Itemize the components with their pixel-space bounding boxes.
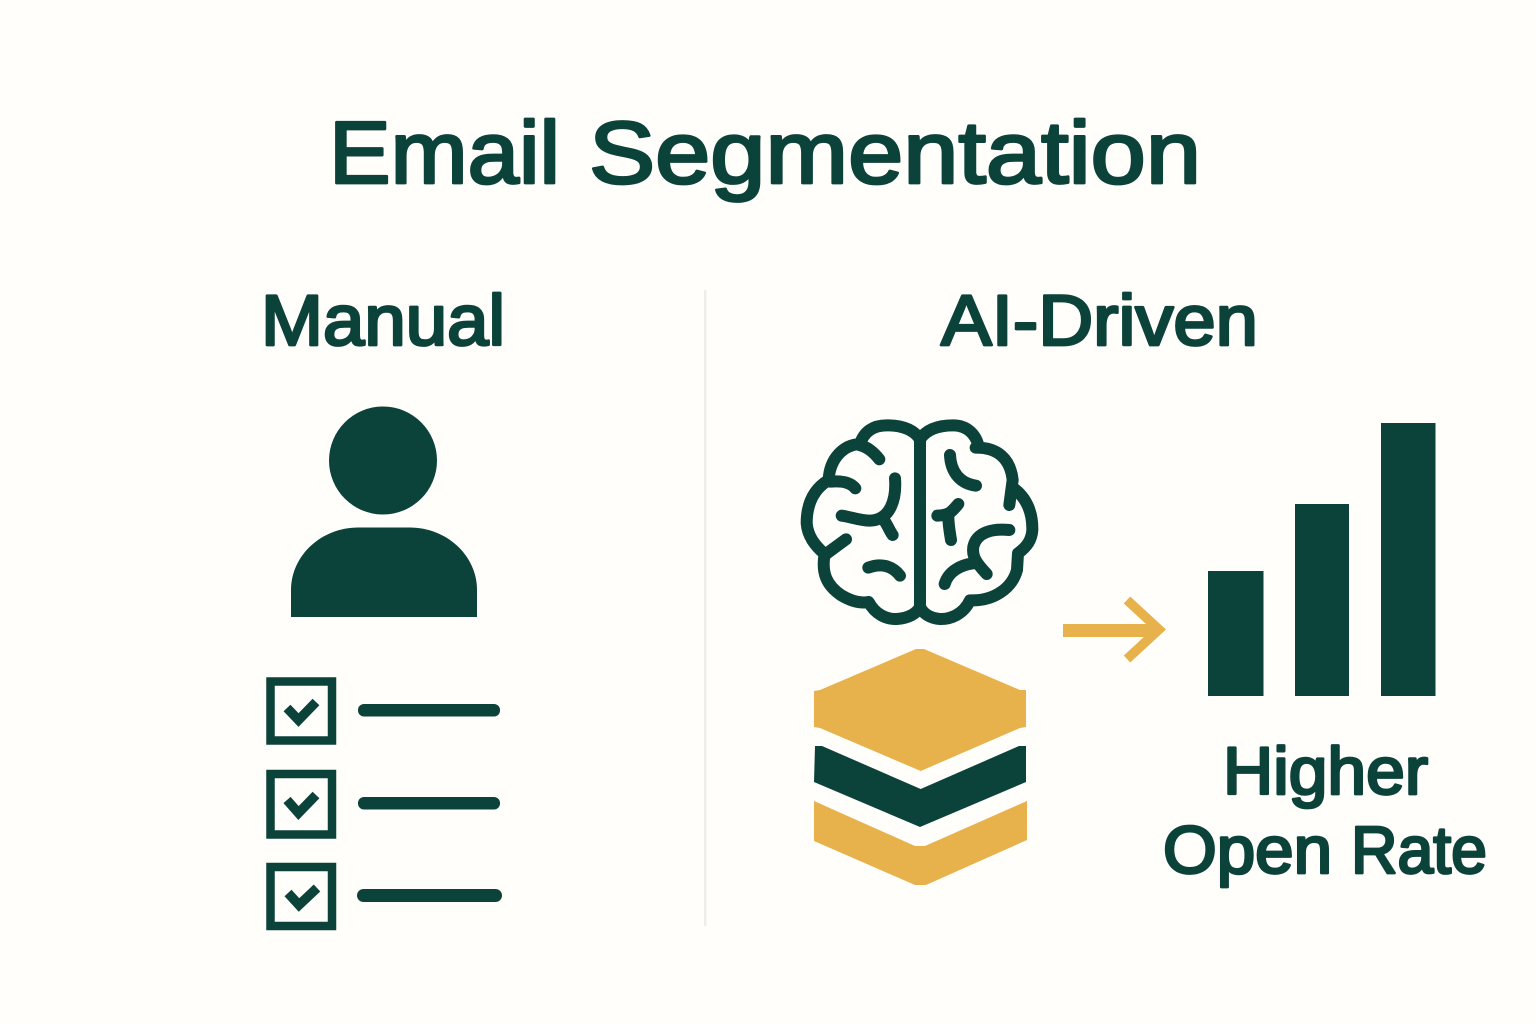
icon: brain xyxy=(807,425,1032,619)
panel: manual xyxy=(261,282,505,926)
checklist item 3 xyxy=(270,867,502,926)
checklist xyxy=(270,682,502,926)
icon: layered segments xyxy=(814,649,1027,885)
heading: manual: Manual xyxy=(261,282,505,361)
title xyxy=(329,103,1201,202)
arrow xyxy=(1063,600,1159,659)
bar chart xyxy=(1208,423,1436,696)
checklist item 1 xyxy=(270,682,500,740)
caption word: Rate: Rate xyxy=(1351,813,1487,888)
title word: Email: Email xyxy=(329,103,560,202)
bottom gold layer xyxy=(814,801,1027,885)
caption word: Open: Open xyxy=(1163,813,1332,888)
middle dark layer xyxy=(814,746,1026,827)
title word: Segmentation: Segmentation xyxy=(589,103,1201,202)
caption: higher open rate xyxy=(1163,734,1487,888)
panel: AI-driven xyxy=(807,282,1487,888)
icon: person xyxy=(291,406,477,617)
heading: AI-driven: AI-Driven xyxy=(941,282,1258,361)
checklist item 2 xyxy=(270,774,500,834)
top gold layer xyxy=(814,649,1026,771)
caption line 1: Higher xyxy=(1223,734,1428,809)
